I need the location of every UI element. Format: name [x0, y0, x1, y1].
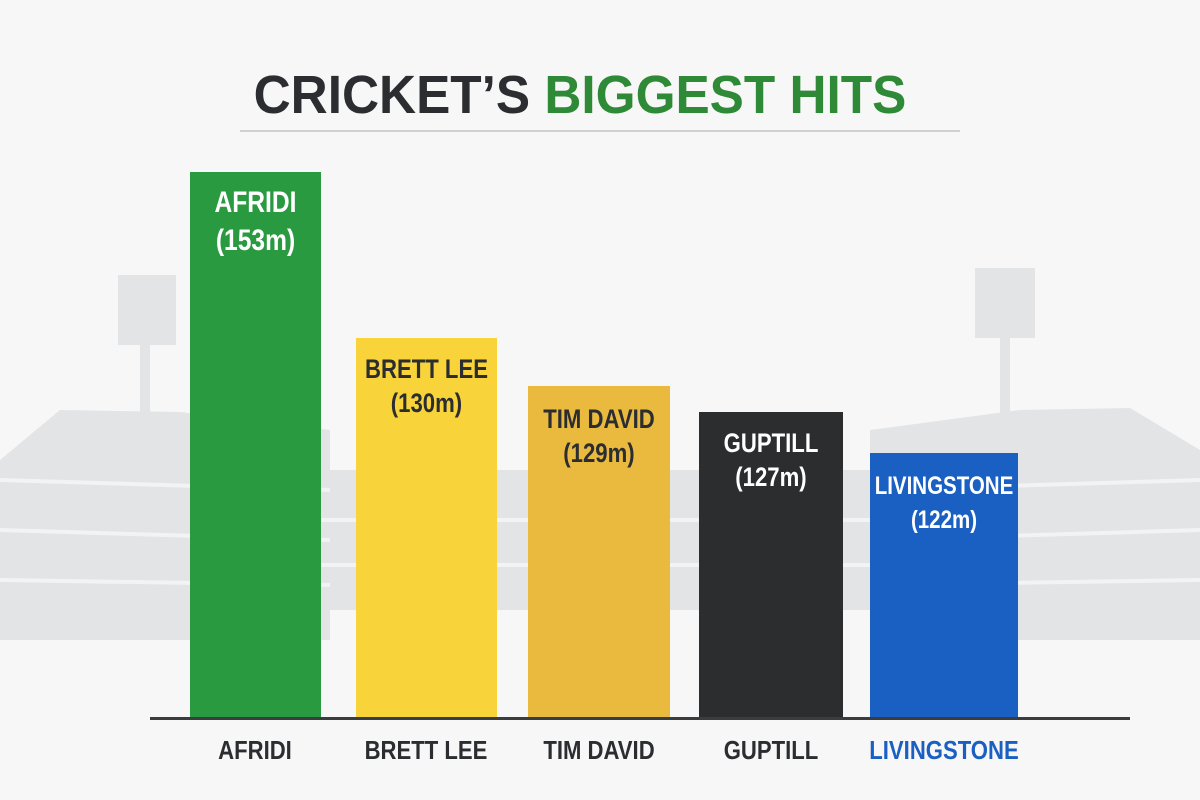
bar: Tim David: TIM DAVID [543, 404, 655, 434]
bar: Tim David: (129m) [563, 438, 635, 468]
x-axis labels: TIM DAVID [543, 735, 655, 765]
x-axis labels: BRETT LEE [365, 735, 487, 765]
bar: Afridi: AFRIDI [214, 186, 296, 219]
x-axis labels: GUPTILL [724, 735, 818, 765]
bar: Afridi [190, 172, 321, 718]
bar: Livingstone: LIVINGSTONE [875, 472, 1013, 500]
bar: Brett Lee [356, 338, 497, 718]
x-axis labels: LIVINGSTONE [869, 735, 1019, 765]
bar: Afridi: (153m) [216, 224, 295, 257]
bar: Brett Lee: BRETT LEE [365, 354, 488, 384]
bar: Livingstone [870, 453, 1018, 718]
x-axis labels: AFRIDI [218, 735, 292, 765]
bar: Tim David [528, 386, 670, 718]
bar: Guptill [699, 412, 843, 718]
bar: Brett Lee: (130m) [391, 388, 462, 418]
bar: Guptill: GUPTILL [724, 428, 818, 458]
bar: Livingstone: (122m) [911, 506, 977, 534]
bar: Guptill: (127m) [735, 462, 807, 492]
title: CRICKET’S BIGGEST HITS [254, 65, 906, 125]
